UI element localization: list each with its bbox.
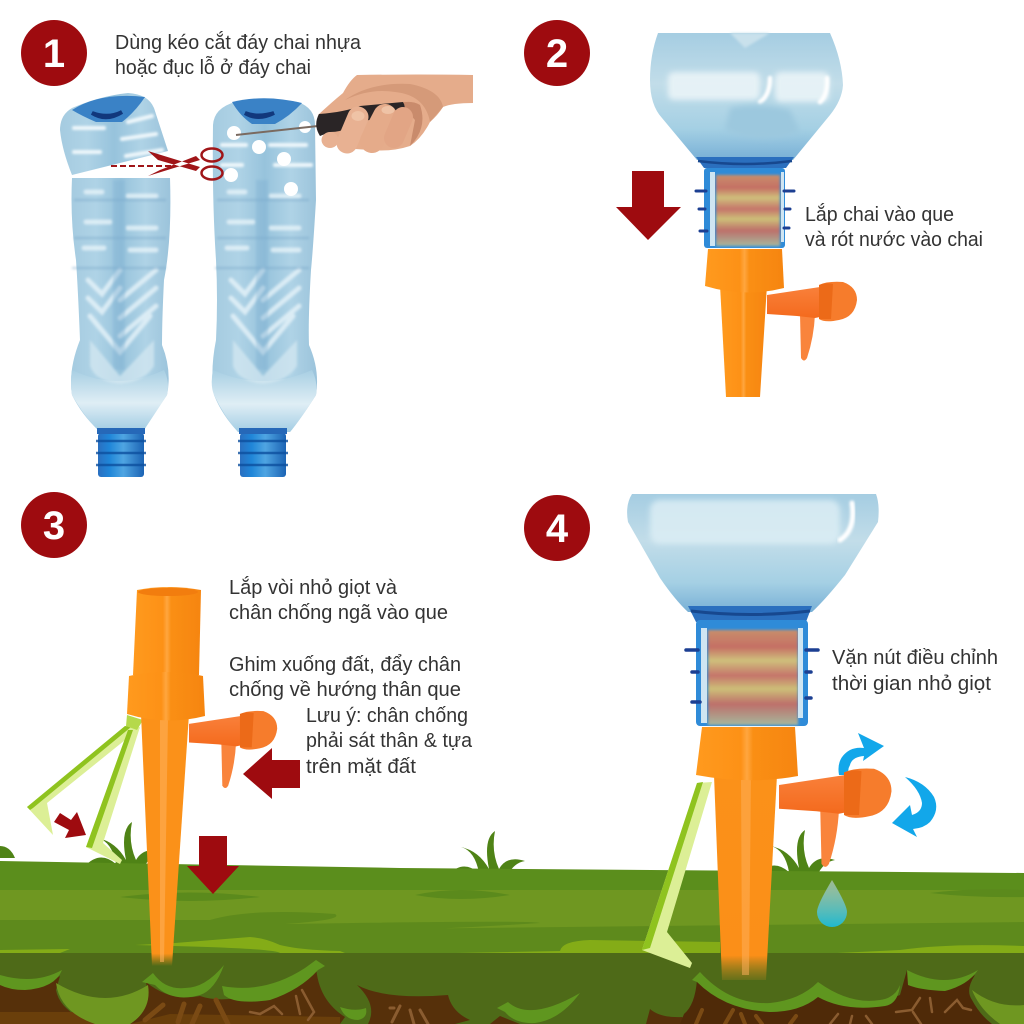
orange tap assembly xyxy=(705,249,857,397)
bottle fitted on stake xyxy=(650,33,857,397)
scissors with dashed cut line xyxy=(111,148,222,180)
grass tufts xyxy=(0,822,835,877)
lower bottle body xyxy=(71,178,170,430)
step 1 instruction text: hoặc đục lỗ ở đáy chai xyxy=(115,56,311,79)
step 1 instruction text xyxy=(115,31,362,79)
step 3 instruction text: Lưu ý: chân chống xyxy=(306,705,468,727)
step 2 instruction text xyxy=(805,203,983,251)
ground: grass and soil illustration xyxy=(0,822,1024,1024)
step badge 3 xyxy=(21,492,87,558)
bottle fitted on stake xyxy=(627,494,892,980)
water drop xyxy=(817,880,847,927)
bottle neck with thread xyxy=(696,157,794,248)
step 4 instruction text xyxy=(832,647,998,695)
panel: step 4 adjust dripper xyxy=(524,494,998,980)
soil xyxy=(0,976,95,1024)
small diagonal arrow xyxy=(54,812,86,838)
cut-off bottle top xyxy=(60,93,168,175)
step 1 instruction text: Dùng kéo cắt đáy chai nhựa xyxy=(115,31,362,54)
step 3 instruction text: chân chống ngã vào que xyxy=(229,602,448,624)
green support leg xyxy=(642,782,712,968)
step 3 instruction text: Lắp vòi nhỏ giọt và xyxy=(229,576,398,599)
light green lobes xyxy=(56,983,1024,1024)
rotation arrows xyxy=(838,733,936,837)
green support legs xyxy=(27,715,143,864)
roots xyxy=(145,990,971,1024)
step badge 2: 2 xyxy=(546,32,568,76)
green scallop crescents xyxy=(0,960,978,1023)
orange tap assembly xyxy=(696,727,892,980)
step 3 instruction text: Ghim xuống đất, đẩy chân xyxy=(229,654,461,676)
step 3 instruction text xyxy=(229,576,473,778)
panel: step 1 cut or pierce bottle xyxy=(21,20,473,477)
step badge 4: 4 xyxy=(546,507,569,551)
step 4 instruction text: thời gian nhỏ giọt xyxy=(832,673,991,695)
step badge 4 xyxy=(524,495,590,561)
step badge 1: 1 xyxy=(43,32,65,76)
down arrow xyxy=(616,171,681,240)
bottle neck xyxy=(96,428,146,477)
orange stake with dripper xyxy=(127,587,277,966)
step 2 instruction text: và rót nước vào chai xyxy=(805,229,983,251)
lime highlights xyxy=(0,937,1024,953)
step 3 instruction text: chống về hướng thân que xyxy=(229,679,461,701)
bottle neck with thread xyxy=(686,606,818,726)
step 3 instruction text: phải sát thân & tựa xyxy=(306,730,473,752)
step badge 3: 3 xyxy=(43,504,65,548)
panel: step 2 attach bottle xyxy=(524,20,983,397)
bottle with punched holes xyxy=(212,98,317,477)
down arrow xyxy=(187,836,239,894)
bottle cut in two pieces xyxy=(60,93,170,477)
step 2 instruction text: Lắp chai vào que xyxy=(805,203,954,226)
panel: step 3 insert stake xyxy=(21,492,473,966)
step 3 instruction text: trên mặt đất xyxy=(306,756,416,778)
step 4 instruction text: Vặn nút điều chỉnh xyxy=(832,647,998,669)
step badge 1 xyxy=(21,20,87,86)
step badge 2 xyxy=(524,20,590,86)
left arrow xyxy=(243,748,300,799)
bottle funnel xyxy=(650,33,843,160)
punched holes xyxy=(224,121,311,196)
hand with screwdriver xyxy=(236,74,473,150)
bottle funnel xyxy=(627,494,879,612)
